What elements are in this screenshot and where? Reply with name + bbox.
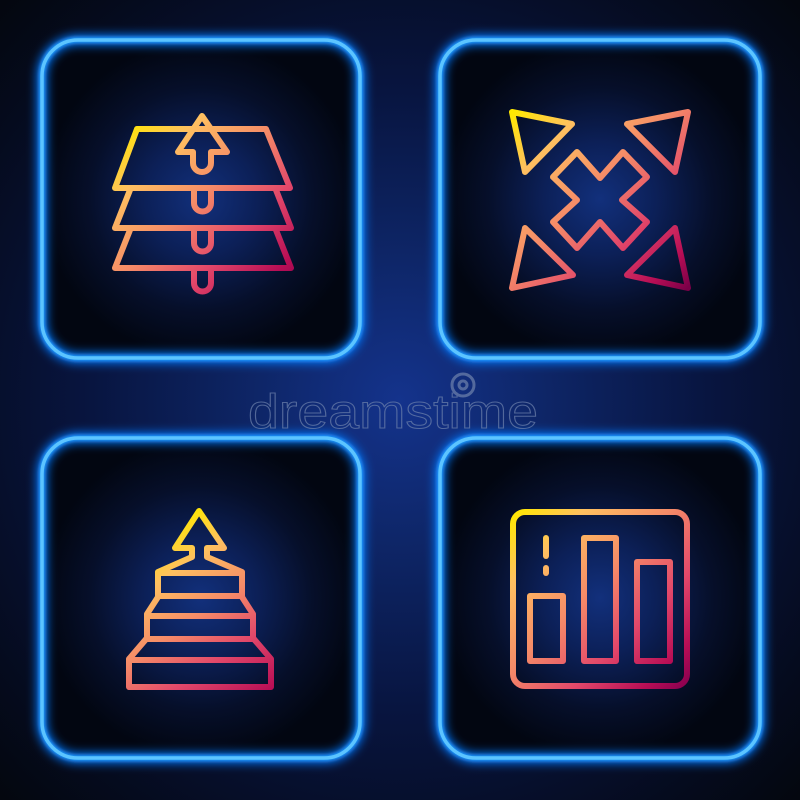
watermark wordmark: dreamstime xyxy=(248,386,538,439)
icon: stepped pyramid with up arrow xyxy=(129,511,271,687)
icon: bar chart in rounded frame xyxy=(513,512,687,686)
panel: bottom-right bar chart icon xyxy=(440,438,760,758)
panel: top-right expand icon xyxy=(440,40,760,358)
panel: bottom-left pyramid icon xyxy=(42,438,360,758)
panel: top-left layers icon xyxy=(42,40,360,358)
icon: cross with four triangles xyxy=(512,112,688,288)
watermark logo spiral xyxy=(452,374,474,396)
watermark xyxy=(248,374,538,439)
icon: stacked layers with up arrow xyxy=(115,116,291,292)
